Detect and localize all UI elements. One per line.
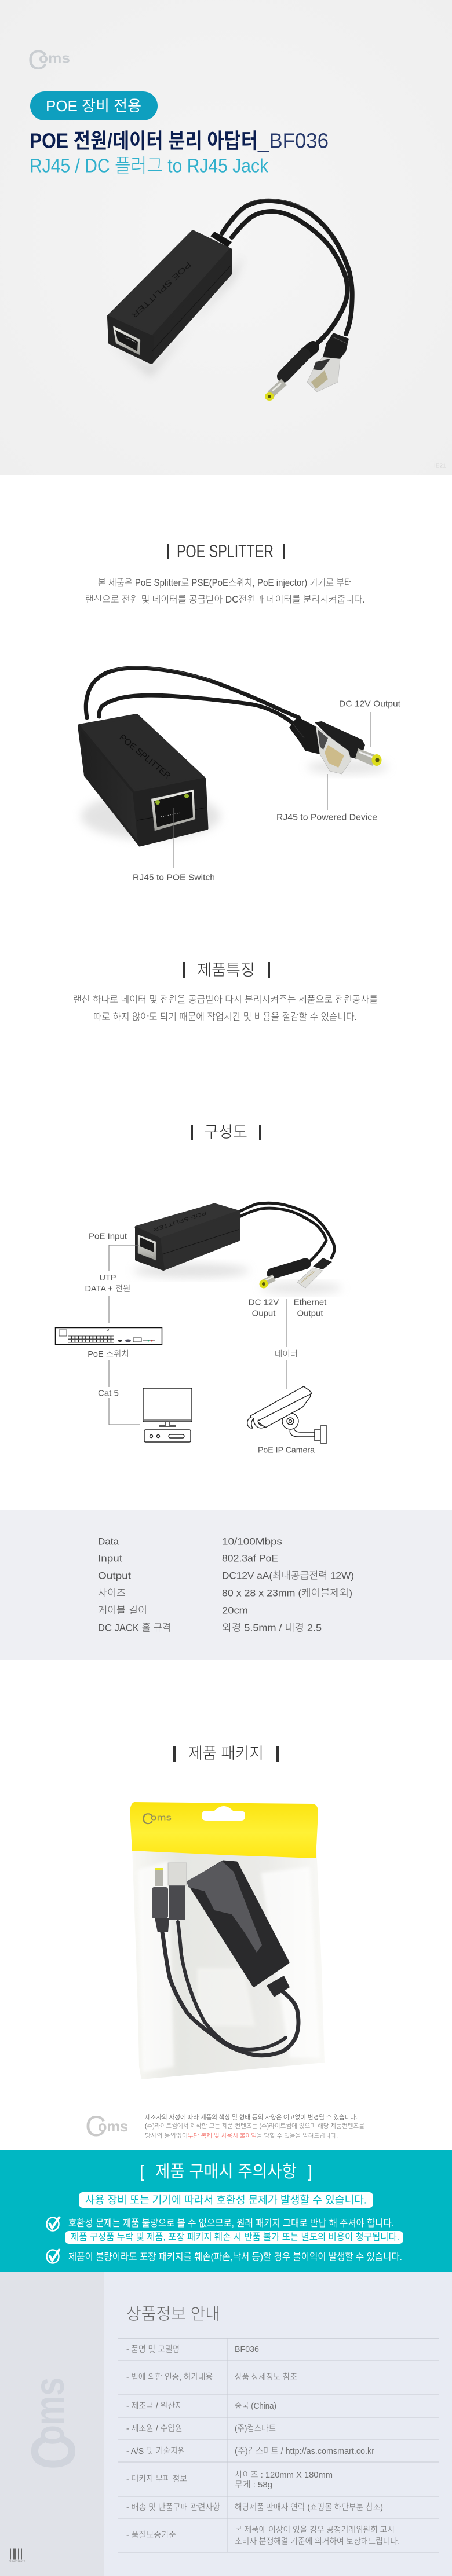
description <box>85 577 365 605</box>
label: DC 12V Output <box>249 1298 279 1319</box>
heading: 제품 패키지 <box>188 1745 264 1762</box>
icon: check 1 <box>46 2217 60 2231</box>
photo: splitter product: POE SPLITTER <box>130 260 193 320</box>
description: 본 제품은 PoE Splitter로 PSE(PoE스위치, PoE injector) 기기로 부터 <box>98 577 352 588</box>
spec rows: Data <box>98 1536 119 1547</box>
caution title: 제품 구매시 주의사항 <box>155 2163 297 2181</box>
RJ45 port <box>113 326 140 355</box>
label: Ethernet Output: Output <box>297 1308 323 1319</box>
info table: 사이즈 : 120mm X 180mm <box>235 2470 333 2480</box>
label: DC 12V Output: DC 12V Output <box>339 699 401 709</box>
info table: 본 제품에 이상이 있을 경우 공정거래위원회 고시 <box>235 2525 395 2535</box>
subtitle: RJ45 / DC 플러그 to RJ45 Jack <box>30 155 268 176</box>
notice text: 을 당할 수 있음을 알려드립니다. <box>257 2132 338 2140</box>
caution line 2: 제품이 불량이라도 포장 패키지를 훼손(파손,낙서 등)할 경우 불이익이 발생할 수 있습니다. <box>68 2251 402 2262</box>
caution title: [ <box>140 2163 144 2181</box>
code mark: IE21 <box>434 463 446 469</box>
panel: 제품 패키지 <box>85 1745 364 2142</box>
watermark: vertical Coms logo <box>18 2377 88 2469</box>
badge: POE 장비 전용 <box>30 91 158 120</box>
logo: Coms: oms <box>39 51 70 66</box>
heading <box>191 1124 261 1141</box>
label: DC 12V Output: Ouput <box>252 1308 276 1319</box>
notice text: 제조사의 사정에 따라 제품의 색상 및 형태 등의 사양은 예고없이 변경될 수 있습니다. <box>145 2113 358 2121</box>
heading: 구성도 <box>204 1124 247 1141</box>
RJ45 port <box>151 790 195 831</box>
panel: POE SPLITTER intro <box>79 541 401 882</box>
label: PoE IP Camera: PoE IP Camera <box>258 1445 315 1455</box>
watermark: vertical Coms logo: oms <box>27 2377 73 2445</box>
info heading: 상품정보 안내 <box>126 2305 220 2322</box>
DC plug <box>315 721 381 766</box>
device body <box>109 232 231 362</box>
device in bag <box>152 1861 298 2056</box>
caution line 1: 호환성 문제는 제품 불량으로 볼 수 없으므로, 원래 패키지 그대로 반납 해 주셔야 합니다. <box>68 2218 394 2229</box>
caution title: ] <box>308 2163 312 2181</box>
heading: 제품특징 <box>197 962 255 979</box>
info table: BF036 <box>235 2345 259 2354</box>
photo: splitter product <box>109 199 352 401</box>
title: POE 전원/데이터 분리 아답터 <box>30 129 258 153</box>
spec rows: DC12V aA(최대공급전력 12W) <box>222 1570 354 1581</box>
icon: check 2 <box>46 2249 60 2263</box>
panel: 구성도 <box>56 1124 342 1455</box>
label: Ethernet Output: Ethernet <box>294 1298 327 1307</box>
logo on bag <box>142 1810 172 1828</box>
heading <box>183 962 270 979</box>
info table: (주)컴스마트 / http://as.comsmart.co.kr <box>235 2446 374 2456</box>
label: RJ45 to POE Switch: RJ45 to POE Switch <box>133 873 215 882</box>
logo on bag: oms <box>151 1813 172 1822</box>
RJ45 plug <box>289 717 351 774</box>
info table: 무게 : 58g <box>235 2480 272 2490</box>
label: Cat 5: Cat 5 <box>98 1388 119 1399</box>
photo: splitter <box>133 1203 342 1294</box>
info table <box>118 2338 439 2552</box>
label: Cat 5 <box>98 1388 140 1425</box>
logo on bag: C <box>142 1810 153 1828</box>
RJ45 port <box>138 1235 156 1260</box>
watermark: vertical Coms logo: C <box>18 2435 88 2469</box>
spec rows: Output <box>98 1570 131 1581</box>
cables <box>86 668 299 718</box>
heading: POE SPLITTER <box>177 541 274 562</box>
panel: specifications <box>0 1510 452 1660</box>
RJ45 plug <box>307 333 349 392</box>
photo: splitter labelled: POE SPLITTER <box>118 732 173 781</box>
icon: IP camera <box>247 1386 327 1443</box>
description: 랜선 하나로 데이터 및 전원을 공급받아 다시 분리시켜주는 제품으로 전원공사를 <box>73 994 378 1005</box>
label: PoE 스위치 <box>88 1349 129 1387</box>
panel: hero <box>0 0 452 475</box>
logo: Coms grey <box>85 2110 128 2142</box>
barcode: 01549718917 <box>9 2560 25 2563</box>
callout: compatibility warning: 사용 장비 또는 기기에 따라서 호환성 문제가 발생할 수 있습니다. <box>85 2194 367 2207</box>
notice text: 무단 복제 및 사용시 불이익 <box>188 2132 257 2140</box>
spec rows <box>98 1536 354 1634</box>
description: 따로 하지 않아도 되기 때문에 작업시간 및 비용을 절감할 수 있습니다. <box>93 1011 357 1022</box>
info table: (주)컴스마트 <box>235 2424 276 2434</box>
spec rows: 80 x 28 x 23mm (케이블제외) <box>222 1587 352 1599</box>
notice text: 당사의 동의없이 <box>145 2132 188 2140</box>
info table: - A/S 및 기술지원 <box>126 2446 185 2456</box>
description: 랜선으로 전원 및 데이터를 공급받아 DC전원과 데이터를 분리시켜줍니다. <box>85 594 365 605</box>
RJ45 plug <box>297 1258 332 1288</box>
icon: monitor and PC <box>143 1388 192 1442</box>
spec rows: 케이블 길이 <box>98 1605 147 1616</box>
spec rows: 802.3af PoE <box>222 1553 278 1564</box>
barcode <box>9 2554 25 2563</box>
photo: packaged product <box>130 1802 325 2079</box>
label: PoE 스위치: PoE 스위치 <box>88 1349 129 1359</box>
label: DC 12V Output: DC 12V <box>249 1298 279 1307</box>
spec rows: 사이즈 <box>98 1587 126 1599</box>
logo: Coms <box>28 44 70 75</box>
callout: return cost: 제품 구성품 누락 및 제품, 포장 패키지 훼손 시 반품 불가 또는 별도의 비용이 청구됩니다. <box>71 2232 399 2243</box>
device body <box>79 715 207 845</box>
logo: Coms grey: C <box>85 2110 106 2142</box>
description <box>73 994 378 1022</box>
panel: product info <box>0 2272 452 2576</box>
label: Ethernet Output <box>294 1298 327 1319</box>
label: UTP data and power: DATA + 전원 <box>85 1284 130 1294</box>
notice text: (주)라이트컴에서 제작한 모든 제품 컨텐츠는 (주)라이트컴에 있으며 해당 제품컨텐츠를 <box>145 2122 364 2130</box>
icon: PoE switch <box>56 1328 162 1344</box>
yellow header <box>130 1802 318 1858</box>
photo: splitter labelled <box>79 667 388 845</box>
info table: 중국 (China) <box>235 2402 276 2411</box>
logo: Coms grey: oms <box>98 2118 128 2135</box>
spec rows: Input <box>98 1553 122 1564</box>
spec rows: DC JACK 홀 규격 <box>98 1622 171 1634</box>
info table: - 품명 및 모델명 <box>126 2344 180 2354</box>
label: RJ45 to Powered Device: RJ45 to Powered Device <box>276 813 377 822</box>
label: 데이터: 데이터 <box>275 1349 298 1359</box>
strain relief <box>210 232 232 247</box>
label: DC 12V Output <box>339 699 401 747</box>
photo: splitter: POE SPLITTER <box>152 1210 207 1233</box>
info table: 해당제품 판매자 연락 (쇼핑몰 하단부분 참조) <box>235 2502 383 2512</box>
label: UTP data and power <box>85 1274 130 1323</box>
bag body <box>132 1847 325 2079</box>
info table: - 법에 의한 인증, 허가내용 <box>126 2372 213 2382</box>
info table: - 제조국 / 원산지 <box>126 2401 183 2411</box>
info table: - 품질보증기준 <box>126 2530 176 2540</box>
panel: 제품특징 <box>73 962 378 1022</box>
title: _BF036 <box>257 129 329 153</box>
notice text <box>145 2113 364 2140</box>
badge: POE 장비 전용: POE 장비 전용 <box>46 97 141 115</box>
info table: - 배송 및 반품구매 관련사항 <box>126 2502 220 2512</box>
DC plug <box>260 1264 305 1289</box>
info table: 소비자 분쟁해결 기준에 의거하여 보상해드립니다. <box>235 2537 400 2546</box>
info table: - 제조원 / 수입원 <box>126 2424 183 2434</box>
logo: Coms: C <box>28 44 48 75</box>
DC plug <box>265 347 313 401</box>
info table: 상품 상세정보 참조 <box>235 2372 297 2382</box>
label: PoE Input: PoE Input <box>89 1232 127 1241</box>
spec rows: 20cm <box>222 1605 248 1616</box>
info table: - 패키지 부피 정보 <box>126 2474 187 2484</box>
cables <box>222 201 352 334</box>
label: UTP data and power: UTP <box>100 1274 116 1283</box>
spec rows: 10/100Mbps <box>222 1536 282 1547</box>
panel: purchase cautions <box>0 2150 452 2272</box>
spec rows: 외경 5.5mm / 내경 2.5 <box>222 1622 322 1634</box>
label: PoE Input <box>89 1232 139 1271</box>
